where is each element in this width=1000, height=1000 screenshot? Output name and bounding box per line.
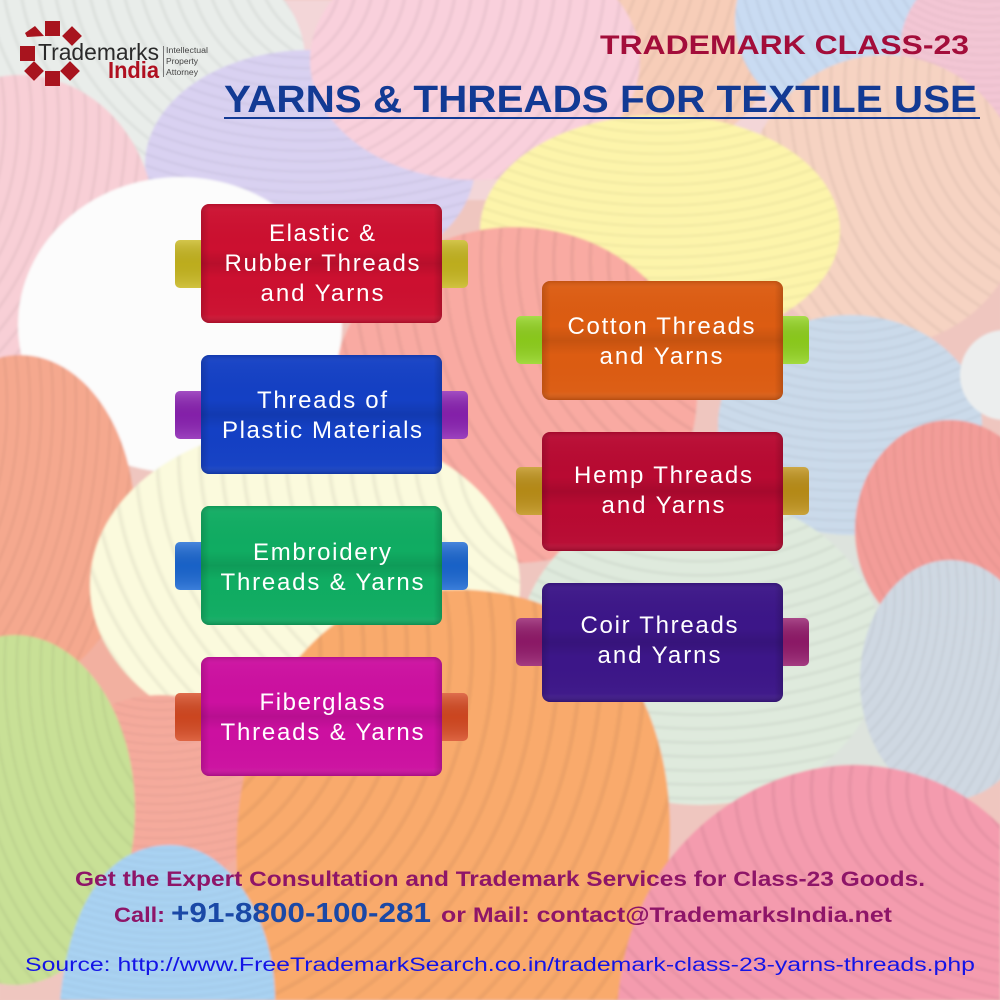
logo: Trademarks India: Trademarks xyxy=(38,39,159,65)
spool: fiberglass xyxy=(175,657,468,776)
spool: coir: and Yarns xyxy=(598,642,720,669)
call to action: Get the Expert Consultation and Trademark Services for Class-23 Goods. xyxy=(75,868,925,891)
spool: fiberglass: Fiberglass xyxy=(260,689,384,716)
logo: Trademarks India: India xyxy=(108,57,159,83)
spool: elastic and rubber: Elastic & xyxy=(269,220,375,247)
logo: Trademarks India: Attorney xyxy=(166,68,198,77)
spool: elastic and rubber: and Yarns xyxy=(260,280,384,307)
contact line: Call: xyxy=(114,904,165,927)
spool: hemp xyxy=(516,432,809,551)
spool: fiberglass: Threads & Yarns xyxy=(220,719,424,746)
spool: elastic and rubber: Rubber Threads xyxy=(224,250,420,277)
heading: trademark class: TRADEMARK CLASS-23 xyxy=(600,30,969,60)
spool: embroidery: Threads & Yarns xyxy=(220,569,424,596)
spool: cotton: Cotton Threads xyxy=(568,313,754,340)
contact line: or Mail: contact@TrademarksIndia.net xyxy=(441,904,892,927)
spool: hemp: Hemp Threads xyxy=(574,462,752,489)
contact line xyxy=(114,897,892,928)
spool: coir xyxy=(516,583,809,702)
spool: plastic materials: Threads of xyxy=(257,387,387,414)
spool: coir: Coir Threads xyxy=(580,612,738,639)
logo: Trademarks India xyxy=(20,21,208,86)
spool: elastic and rubber xyxy=(175,204,468,323)
spool: cotton xyxy=(516,281,809,400)
spool: plastic materials: Plastic Materials xyxy=(222,417,422,444)
logo: Trademarks India: Intellectual xyxy=(166,46,208,55)
spool: hemp: and Yarns xyxy=(602,492,724,519)
spool: plastic materials xyxy=(175,355,468,474)
source line: Source: http://www.FreeTrademarkSearch.co.in/trademark-class-23-yarns-threads.php xyxy=(25,955,975,976)
logo: Trademarks India: Property xyxy=(166,57,198,66)
title: yarns and threads: YARNS & THREADS FOR TEXTILE USE xyxy=(224,79,977,121)
spool: embroidery: Embroidery xyxy=(253,539,391,566)
spool: embroidery xyxy=(175,506,468,625)
contact line: +91-8800-100-281 xyxy=(171,897,431,928)
spool: cotton: and Yarns xyxy=(600,343,722,370)
